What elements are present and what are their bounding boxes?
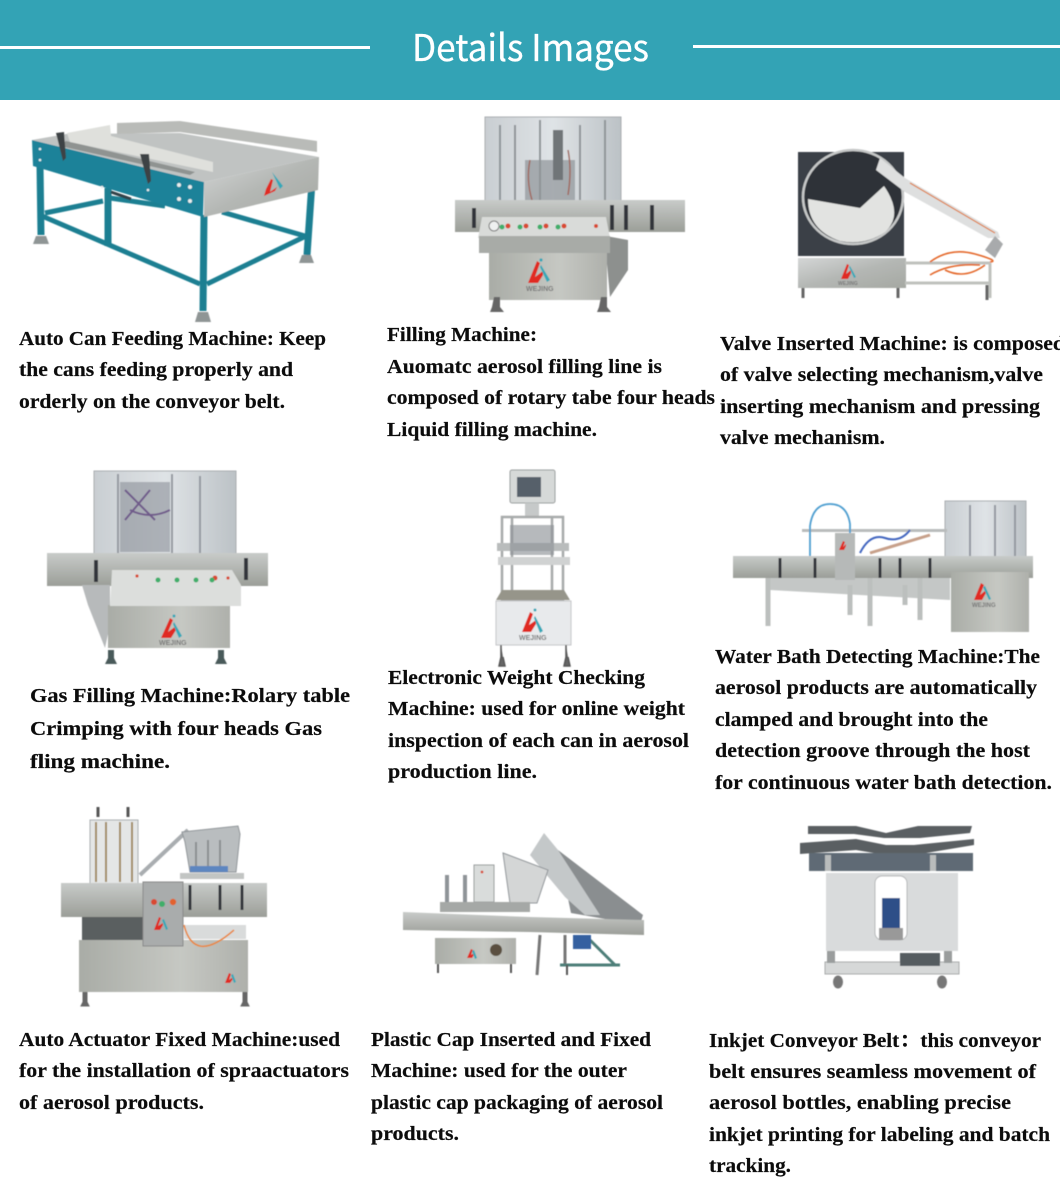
description text (387, 324, 715, 441)
panel: gas filling machine (30, 471, 350, 773)
description text: inserting mechanism and pressing (720, 396, 1041, 418)
panel: filling machine (387, 117, 715, 441)
description text: Machine: used for online weight (388, 698, 685, 720)
logo (972, 583, 996, 609)
machine image: gas filler (47, 471, 268, 664)
panel: auto actuator fixed machine (19, 807, 349, 1114)
machine image: inkjet conveyor (800, 826, 974, 988)
description text (720, 333, 1060, 449)
logo: WEJING (838, 281, 858, 287)
description text: Crimping with four heads Gas (30, 718, 322, 740)
description text: plastic cap packaging of aerosol (371, 1092, 663, 1114)
description text: Auto Can Feeding Machine: Keep (19, 328, 326, 350)
panel: water bath detecting machine (715, 501, 1052, 794)
machine image: actuator fixer (61, 807, 267, 1006)
logo (154, 917, 168, 930)
machine image: can feeder (32, 121, 319, 322)
machine image: weight checker (496, 470, 571, 666)
description text: for the installation of spraactuators (19, 1060, 349, 1082)
description text: Machine: used for the outer (371, 1060, 627, 1082)
description text: aerosol bottles, enabling precise (709, 1092, 1011, 1114)
panel: inkjet conveyor belt (709, 826, 1051, 1177)
logo: WEJING (519, 635, 547, 642)
description text: products. (371, 1123, 459, 1145)
logo: WEJING (972, 603, 996, 609)
description text: composed of rotary tabe four heads (387, 387, 715, 409)
description text: valve mechanism. (720, 427, 885, 449)
description text (371, 1029, 663, 1145)
description text: orderly on the conveyor belt. (19, 391, 285, 413)
description text: of valve selecting mechanism,valve (720, 364, 1043, 386)
logo: WEJING (526, 286, 554, 293)
description text: Electronic Weight Checking (388, 667, 646, 689)
description text: Liquid filling machine. (387, 419, 597, 441)
description text: clamped and brought into the (715, 709, 988, 731)
description text: of aerosol products. (19, 1092, 204, 1114)
description text (715, 646, 1052, 794)
description text: Valve Inserted Machine: is composed (720, 333, 1060, 355)
description text: the cans feeding properly and (19, 359, 294, 381)
description text: belt ensures seamless movement of (709, 1061, 1037, 1083)
logo (264, 172, 283, 196)
description text: inkjet printing for labeling and batch (709, 1124, 1051, 1146)
machine image: cap inserter (403, 833, 644, 975)
logo (838, 264, 858, 287)
logo (526, 258, 554, 293)
title: Details Images (412, 18, 649, 72)
panel: valve inserted machine (720, 150, 1060, 449)
logo (519, 608, 547, 642)
description text: fling machine. (30, 751, 170, 773)
machine image: valve sorter (798, 150, 1003, 300)
panel: plastic cap inserted and fixed machine (371, 833, 663, 1145)
description text: Auto Actuator Fixed Machine:used (19, 1029, 341, 1051)
description text: Gas Filling Machine:Rolary table (30, 685, 350, 707)
description text: tracking. (709, 1155, 791, 1177)
description text (388, 667, 689, 783)
header banner (0, 0, 1060, 100)
panel: auto can feeding machine (19, 121, 326, 413)
logo (159, 614, 187, 647)
description text: Filling Machine: (387, 324, 537, 346)
description text: inspection of each can in aerosol (388, 730, 689, 752)
description text: Inkjet Conveyor Belt：this conveyor (709, 1030, 1041, 1052)
description text: detection groove through the host (715, 740, 1030, 762)
description text (19, 328, 326, 413)
panel: electronic weight checking machine (388, 470, 689, 783)
description text: production line. (388, 761, 537, 783)
logo: WEJING (159, 640, 187, 647)
description text (709, 1030, 1051, 1177)
description text (19, 1029, 349, 1114)
description text: Water Bath Detecting Machine:The (715, 646, 1040, 668)
description text (30, 685, 350, 773)
machine image: liquid filler (455, 117, 685, 312)
description text: Plastic Cap Inserted and Fixed (371, 1029, 652, 1051)
machine image: water bath line (733, 501, 1033, 632)
description text: Auomatc aerosol filling line is (387, 356, 662, 378)
description text: aerosol products are automatically (715, 677, 1038, 699)
logo (467, 949, 477, 959)
description text: for continuous water bath detection. (715, 772, 1052, 794)
